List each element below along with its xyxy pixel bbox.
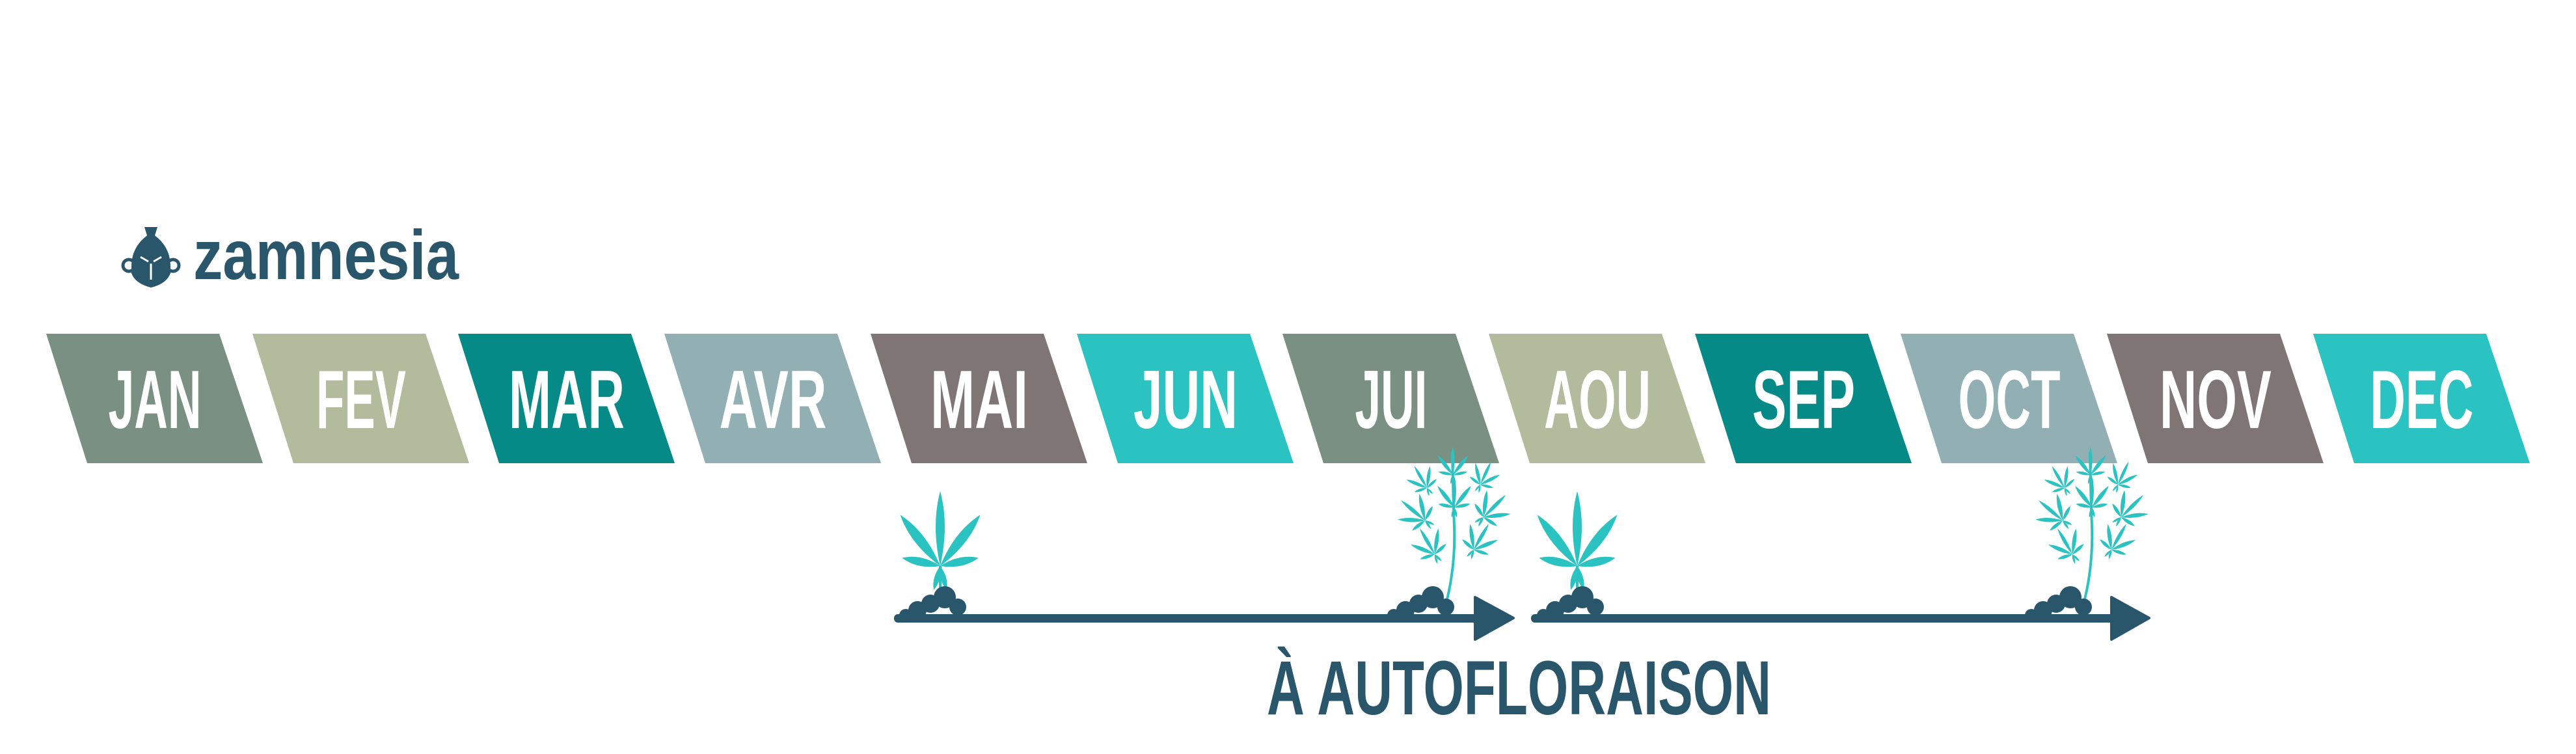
month: JUN: JUN (1133, 353, 1238, 446)
month: MAR: MAR (509, 353, 625, 446)
month: MAI (871, 334, 1087, 463)
icon: seedling (1533, 491, 1621, 604)
icon: mature plant (1389, 446, 1519, 602)
month: MAI: MAI (930, 353, 1028, 446)
month: NOV (2107, 334, 2324, 463)
icon: seedling (896, 491, 984, 604)
month: SEP (1695, 334, 1912, 463)
month: JUN (1077, 334, 1294, 463)
month: AOU: AOU (1544, 353, 1651, 446)
month: JUI (1282, 334, 1499, 463)
month: FEV (252, 334, 469, 463)
icon: mature plant (2027, 446, 2156, 602)
month: JUI: JUI (1355, 353, 1428, 446)
month: DEC (2313, 334, 2530, 463)
month: OCT (1901, 334, 2117, 463)
month: NOV: NOV (2160, 353, 2271, 446)
month: AVR: AVR (720, 353, 826, 446)
arrow 1: grow cycle May-July (894, 446, 1519, 640)
arrow 2: grow cycle Aug-Oct (1531, 446, 2156, 640)
logo: zamnesia (123, 215, 459, 294)
month: AVR (664, 334, 881, 463)
icon: mask (123, 227, 179, 288)
caption: À AUTOFLORAISON: À AUTOFLORAISON (1267, 645, 1771, 731)
month: JAN: JAN (108, 353, 202, 446)
month: SEP: SEP (1752, 353, 1855, 446)
month: AOU (1489, 334, 1705, 463)
month timeline (46, 334, 2530, 463)
month: DEC: DEC (2370, 353, 2474, 446)
logo text: zamnesia (193, 215, 459, 294)
month: FEV: FEV (316, 353, 406, 446)
month: OCT: OCT (1959, 353, 2060, 446)
month: JAN (46, 334, 263, 463)
month: MAR (458, 334, 675, 463)
